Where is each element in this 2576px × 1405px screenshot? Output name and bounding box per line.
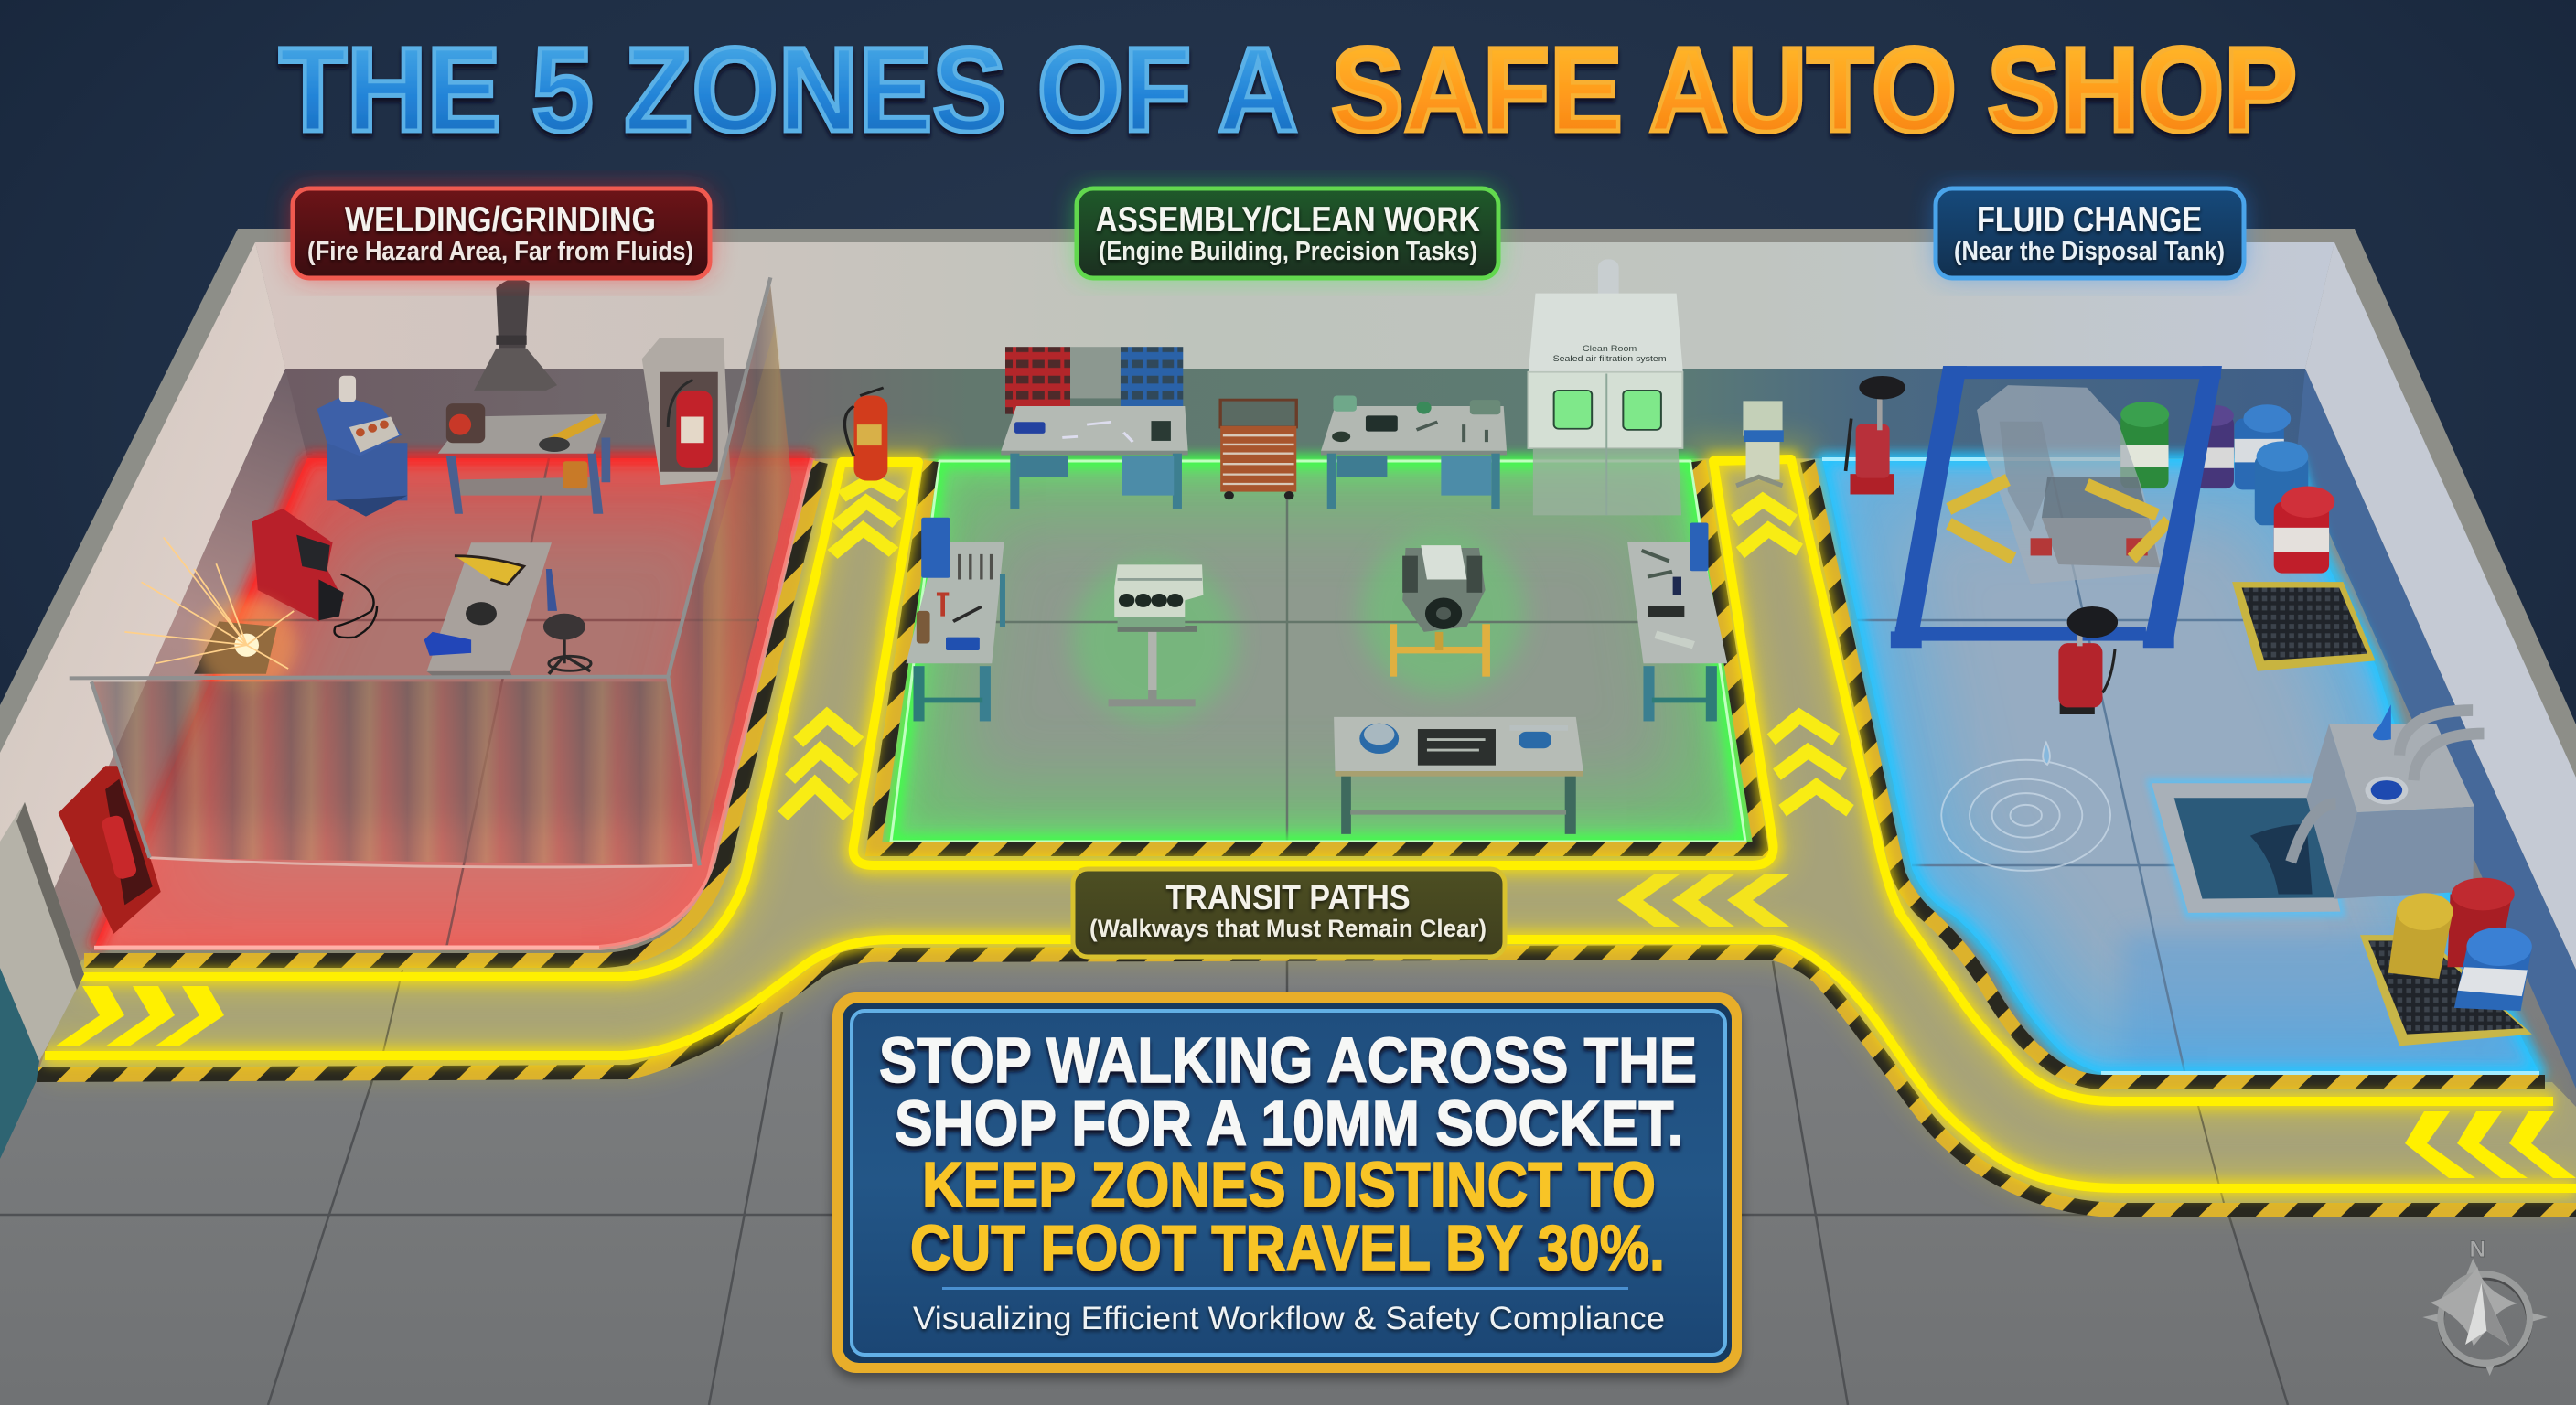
title: THE 5 ZONES OF A [279,22,1298,156]
welding table with sparks [124,538,296,692]
zone floor: assembly green [891,461,1745,842]
parts-bin bench [1001,347,1188,509]
label: fluid change: (Near the Disposal Tank) [1954,237,2225,266]
welding curtain: side [668,285,791,865]
drums behind lift [2120,402,2334,574]
title: SAFE AUTO SHOP [1331,22,2297,156]
chevrons: left walkway lower pointing up [783,716,859,816]
engine block on stand [1109,564,1203,706]
label: fluid change: FLUID CHANGE [1977,200,2202,240]
V8 engine on yellow stand [1390,545,1490,677]
extinguisher by walkway [844,388,887,481]
zone floor: fluid blue [1822,459,2543,1079]
red MIG welder [252,509,377,638]
label: fluid change [1936,188,2244,278]
zone floor: welding red [91,458,812,951]
fluid zone objects [1736,366,2532,1046]
callout panel [832,992,1742,1378]
right side bench [1627,522,1727,721]
shop walls [0,229,2576,1189]
hazard stripes [37,461,2576,1210]
clean room booth: Sealed air filtration system [1553,355,1667,364]
compass rose [2422,1238,2548,1376]
floor base [0,458,2576,1405]
label: transit paths: TRANSIT PATHS [1165,879,1411,917]
chevrons: left walkway upper pointing up [832,479,902,554]
neon yellow path lines [45,459,2576,1188]
shop stool [543,614,591,674]
label: transit paths: (Walkways that Must Remain Clear) [1089,915,1487,942]
clean room sign: Clean Room [1583,344,1637,354]
subtitle: Visualizing Efficient Workflow & Safety Compliance [913,1301,1665,1336]
translucent car on lift [1977,385,2163,584]
headline yellow line one: KEEP ZONES DISTINCT TO [922,1149,1656,1220]
label: assembly/clean work [1077,188,1498,278]
headline white line one: STOP WALKING ACROSS THE [879,1024,1697,1096]
front spill pallet with drums [2360,878,2532,1046]
fume extraction hood [474,279,557,391]
wall extinguisher cabinet [642,338,731,485]
lower floor tile joints [0,960,2576,1405]
fluid exchange machine [1736,401,1784,486]
exit door [0,802,84,1159]
chevrons: bottom-right pointing left [2405,1111,2576,1178]
label: welding/grinding: (Fire Hazard Area, Far from Fluids) [307,237,693,266]
label: transit paths [1073,869,1505,957]
label: welding/grinding: WELDING/GRINDING [345,200,656,240]
compass rose: N [2469,1238,2485,1262]
oil drain front [2058,606,2118,714]
welding zone objects [59,277,791,934]
chevrons: middle transit pointing left [1617,874,1789,927]
oil puddle ripples [1941,743,2110,871]
floor-standing extinguisher cabinet [59,766,161,934]
front precision bench [1334,717,1583,834]
clean room booth [1528,259,1683,515]
welding curtain: front [91,681,693,867]
label: welding/grinding [293,188,710,278]
blue welding machine [317,376,407,517]
headline yellow line two: CUT FOOT TRAVEL BY 30%. [910,1212,1665,1283]
lift arms [1948,480,2169,559]
transit paths floor [37,459,2576,1210]
rolling tool chest [1220,400,1296,499]
chevrons: right walkway pointing up [1734,500,1850,810]
label: assembly/clean work: ASSEMBLY/CLEAN WORK [1096,200,1480,240]
disposal pit [2146,778,2346,918]
grinding bench [438,403,610,514]
chevrons: bottom-left pointing right [55,986,224,1046]
left side bench [906,518,1005,721]
oil drain rear [1846,376,1905,494]
zone neon edges: green [891,461,1745,842]
zone neon edges: red [94,458,812,948]
center work table [424,542,557,678]
label: assembly/clean work: (Engine Building, Precision Tasks) [1099,237,1477,266]
zone neon edges: blue [1822,459,2539,1073]
two-post blue lift [1891,366,2222,648]
spill pallet [2232,582,2376,671]
assembly zone objects [844,259,1727,834]
title [279,22,2297,156]
disposal tank [2291,704,2484,899]
headline white line two: SHOP FOR A 10MM SOCKET. [895,1088,1683,1159]
tool bench [1321,396,1507,509]
curtain rail [70,277,770,865]
